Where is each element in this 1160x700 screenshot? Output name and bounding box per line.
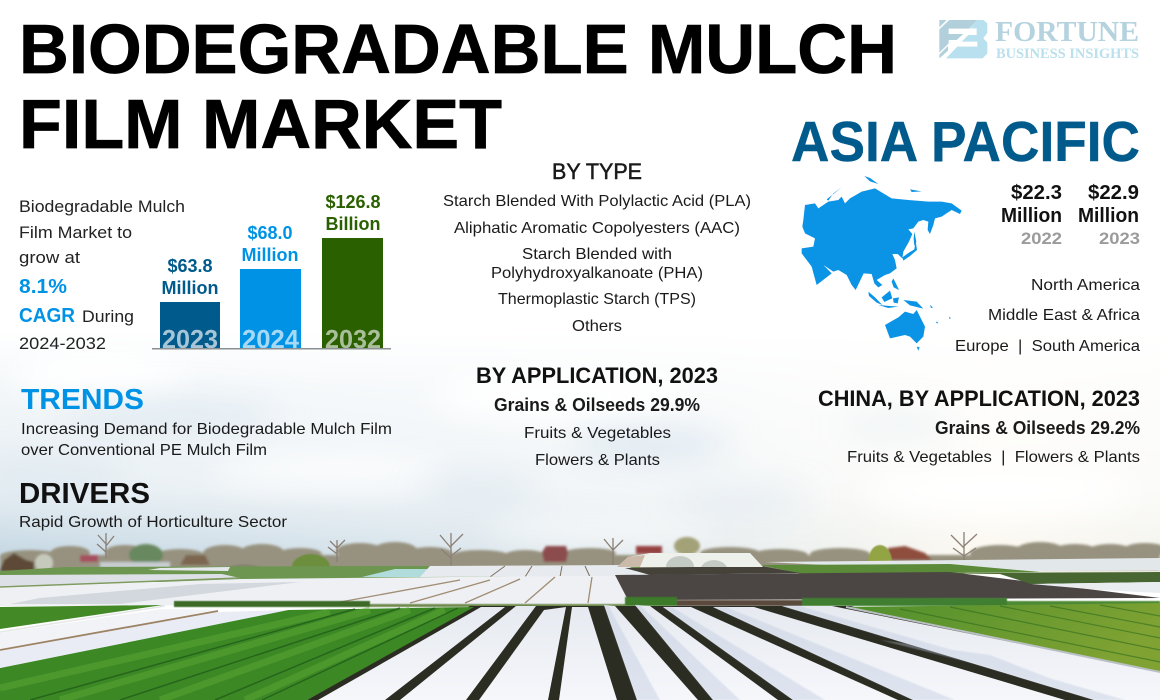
China by application: CHINA, BY APPLICATION, 2023 <box>818 386 1140 411</box>
China by application: Grains & Oilseeds 29.2% <box>935 418 1140 438</box>
value 2023 <box>1078 182 1140 248</box>
value 2023: Million <box>1078 205 1139 227</box>
far tree line <box>0 537 1160 572</box>
title: BIODEGRADABLE MULCH <box>19 10 897 88</box>
China by application: Fruits & Vegetables | Flowers & Plants <box>847 449 1140 466</box>
regional market values <box>1001 182 1140 248</box>
growth statement text <box>19 197 185 353</box>
bar 2024: Million <box>242 245 298 265</box>
value 2022 <box>1001 182 1062 248</box>
title <box>19 10 897 163</box>
bar 2023 <box>160 256 220 354</box>
growth statement text: grow at <box>19 248 80 267</box>
trends: over Conventional PE Mulch Film <box>21 442 267 459</box>
other regions list: North America <box>1031 277 1140 294</box>
back field: covered rows <box>0 576 630 606</box>
other regions list: Middle East & Africa <box>988 307 1140 324</box>
back field: dark soil <box>615 572 1160 600</box>
background: farm field photograph <box>0 532 1160 700</box>
other regions list <box>955 277 1140 355</box>
background: sky and clouds <box>0 197 1160 698</box>
growth statement text: 2024-2032 <box>19 334 106 353</box>
value 2022: 2022 <box>1021 229 1062 248</box>
by application list: Fruits & Vegetables <box>524 425 671 442</box>
foreground base soil <box>307 606 1160 700</box>
left green rows <box>0 605 163 629</box>
value 2023: $22.9 <box>1088 182 1139 204</box>
drivers: DRIVERS <box>19 478 150 510</box>
foreground covered rows <box>318 605 1160 700</box>
title: FILM MARKET <box>19 85 502 163</box>
bar 2023: Million <box>162 278 218 298</box>
right green rows <box>850 603 1160 672</box>
by type list: Aliphatic Aromatic Copolyesters (AAC) <box>454 220 740 237</box>
logo: Fortune Business Insights: BUSINESS INSIGHTS <box>996 46 1139 62</box>
trends <box>21 384 392 459</box>
map: Asia Pacific <box>802 176 962 351</box>
by type list: Starch Blended with <box>522 246 672 263</box>
growth statement text: During <box>82 307 134 326</box>
logo: Fortune Business Insights <box>939 17 1139 62</box>
bare trees <box>97 532 977 574</box>
value 2023: 2023 <box>1099 229 1140 248</box>
bar 2023: 2023 <box>162 324 218 354</box>
bar chart: market size <box>152 192 391 354</box>
trends: Increasing Demand for Biodegradable Mulch Film <box>21 421 392 438</box>
bushes and poplar <box>224 564 264 580</box>
by application list: BY APPLICATION, 2023 <box>476 363 718 388</box>
other regions list: Europe | South America <box>955 338 1140 355</box>
bar 2032: $126.8 <box>325 192 381 212</box>
by type list: Thermoplastic Starch (TPS) <box>498 291 696 308</box>
bar 2024: 2024 <box>242 324 300 354</box>
drivers <box>19 478 288 531</box>
by type list <box>443 159 751 335</box>
by application list <box>476 363 718 469</box>
bar 2024: $68.0 <box>247 223 293 243</box>
by type list: Starch Blended With Polylactic Acid (PLA) <box>443 193 751 210</box>
growth statement text: Biodegradable Mulch <box>19 197 185 216</box>
bar 2032: Billion <box>326 214 380 234</box>
growth statement text: CAGR <box>19 305 76 327</box>
film shadows <box>604 605 1125 700</box>
China by application <box>818 386 1140 466</box>
far fields <box>0 566 640 582</box>
heading: Asia Pacific: ASIA PACIFIC <box>791 110 1140 174</box>
bar 2032 <box>322 192 383 354</box>
logo: Fortune Business Insights: FORTUNE <box>995 17 1139 48</box>
bar 2024 <box>240 223 301 354</box>
by application list: Grains & Oilseeds 29.9% <box>494 395 700 415</box>
bar 2032: 2032 <box>325 324 381 354</box>
by application list: Flowers & Plants <box>535 452 660 469</box>
by type list: Others <box>572 318 622 335</box>
hedge <box>174 597 1160 607</box>
trends: TRENDS <box>21 384 144 416</box>
value 2022: $22.3 <box>1011 182 1062 204</box>
by type list: Polyhydroxyalkanoate (PHA) <box>491 265 703 282</box>
drivers: Rapid Growth of Horticulture Sector <box>19 514 288 531</box>
greenhouses <box>617 553 763 567</box>
growth statement text: 8.1% <box>19 276 67 298</box>
bar 2023: $63.8 <box>167 256 213 276</box>
left white strips <box>0 609 216 650</box>
growth statement text: Film Market to <box>19 223 132 242</box>
by type list: BY TYPE <box>552 159 642 184</box>
value 2022: Million <box>1001 205 1062 227</box>
icon: FB monogram <box>939 20 987 58</box>
